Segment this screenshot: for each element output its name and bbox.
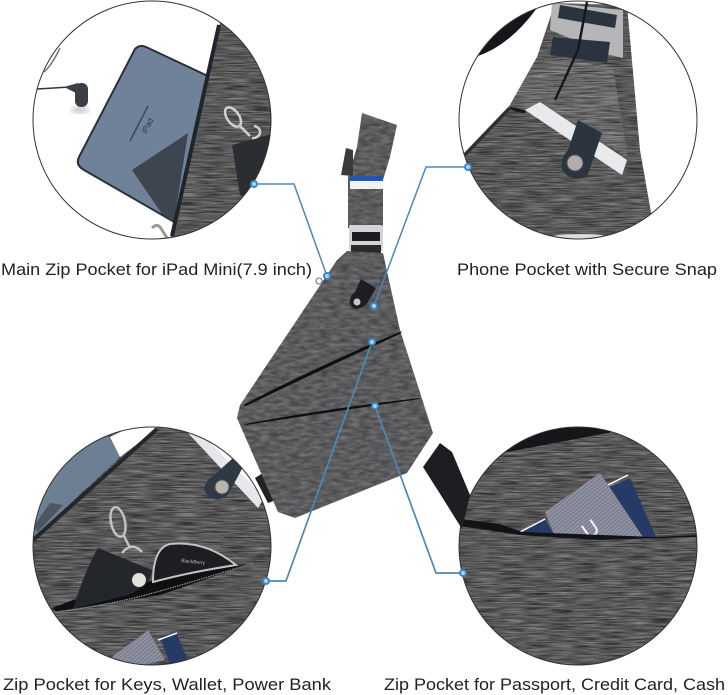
panel: main zip pocket circle (33, 0, 285, 245)
blue band (350, 176, 383, 189)
side tab (255, 473, 276, 503)
icon: carabiner (222, 105, 260, 138)
icon: snap tab (562, 120, 602, 178)
wallet corner (33, 503, 63, 532)
upper pocket flap (510, 57, 628, 158)
callout line: keys pocket (266, 342, 372, 581)
lower zip line (55, 563, 253, 612)
keyring (316, 278, 322, 284)
icon: key pouch (232, 134, 270, 196)
panel: keys wallet power bank pocket circle (32, 426, 272, 666)
white background corner (110, 428, 157, 457)
panel: passport credit card cash pocket circle (455, 420, 700, 670)
lower strap (423, 443, 470, 529)
icon: snap tab (205, 458, 244, 499)
phone snap tab (350, 279, 376, 309)
icon: tablet: iPad (140, 117, 155, 135)
callout line: main zip pocket (254, 184, 327, 276)
fabric body (464, 3, 652, 236)
fabric (455, 425, 700, 670)
icon: buckle and strap (550, 3, 623, 63)
tablet corner (34, 436, 120, 536)
upper strap (345, 110, 400, 230)
fabric (30, 425, 275, 670)
pocket seam (172, 25, 219, 236)
panel: phone pocket circle (455, 0, 697, 245)
fabric side (170, 23, 270, 237)
icon: card: U (577, 514, 604, 544)
icon: silver bottom detail (554, 234, 604, 238)
label: main zip pocket: Main Zip Pocket for iPad Mini(7.9 inch) (1, 260, 312, 279)
earphone wire (555, 2, 587, 100)
lower zip (245, 398, 420, 425)
side seam (465, 108, 510, 155)
pocket zip dark (459, 519, 697, 540)
icon: cable loop (44, 48, 60, 72)
icon: earphone (37, 83, 89, 113)
label: keys pocket: Zip Pocket for Keys, Wallet, Power Bank (3, 675, 332, 694)
icon: phone: BlackBerry (181, 558, 206, 567)
central sling bag (235, 110, 470, 529)
callout line: phone pocket (374, 167, 468, 306)
icon: tablet (78, 46, 210, 223)
pocket edge (510, 108, 525, 112)
label: passport pocket: Zip Pocket for Passport, Credit Card, Cash (384, 675, 725, 694)
callout dots (251, 164, 471, 584)
label: phone pocket: Phone Pocket with Secure Snap (457, 260, 717, 279)
icon: carabiner (108, 506, 142, 553)
upper zip (243, 331, 402, 406)
icon: card (112, 630, 188, 664)
bag body (235, 248, 435, 520)
icon: key pouch (73, 548, 152, 609)
icon: dark object top left (478, 9, 536, 56)
pocket mouth (52, 563, 253, 612)
black top (506, 428, 612, 452)
seam (33, 429, 157, 540)
strap label (341, 148, 353, 176)
icon: passport (520, 475, 656, 537)
icon: wallet corner (132, 133, 188, 222)
icon: phone (525, 102, 627, 175)
phone edge (188, 433, 264, 508)
icon: clip at bottom (152, 225, 167, 238)
icon: phone (153, 543, 236, 582)
icon: card (545, 473, 642, 536)
buckle (349, 225, 383, 253)
callout line: passport pocket (375, 406, 463, 573)
